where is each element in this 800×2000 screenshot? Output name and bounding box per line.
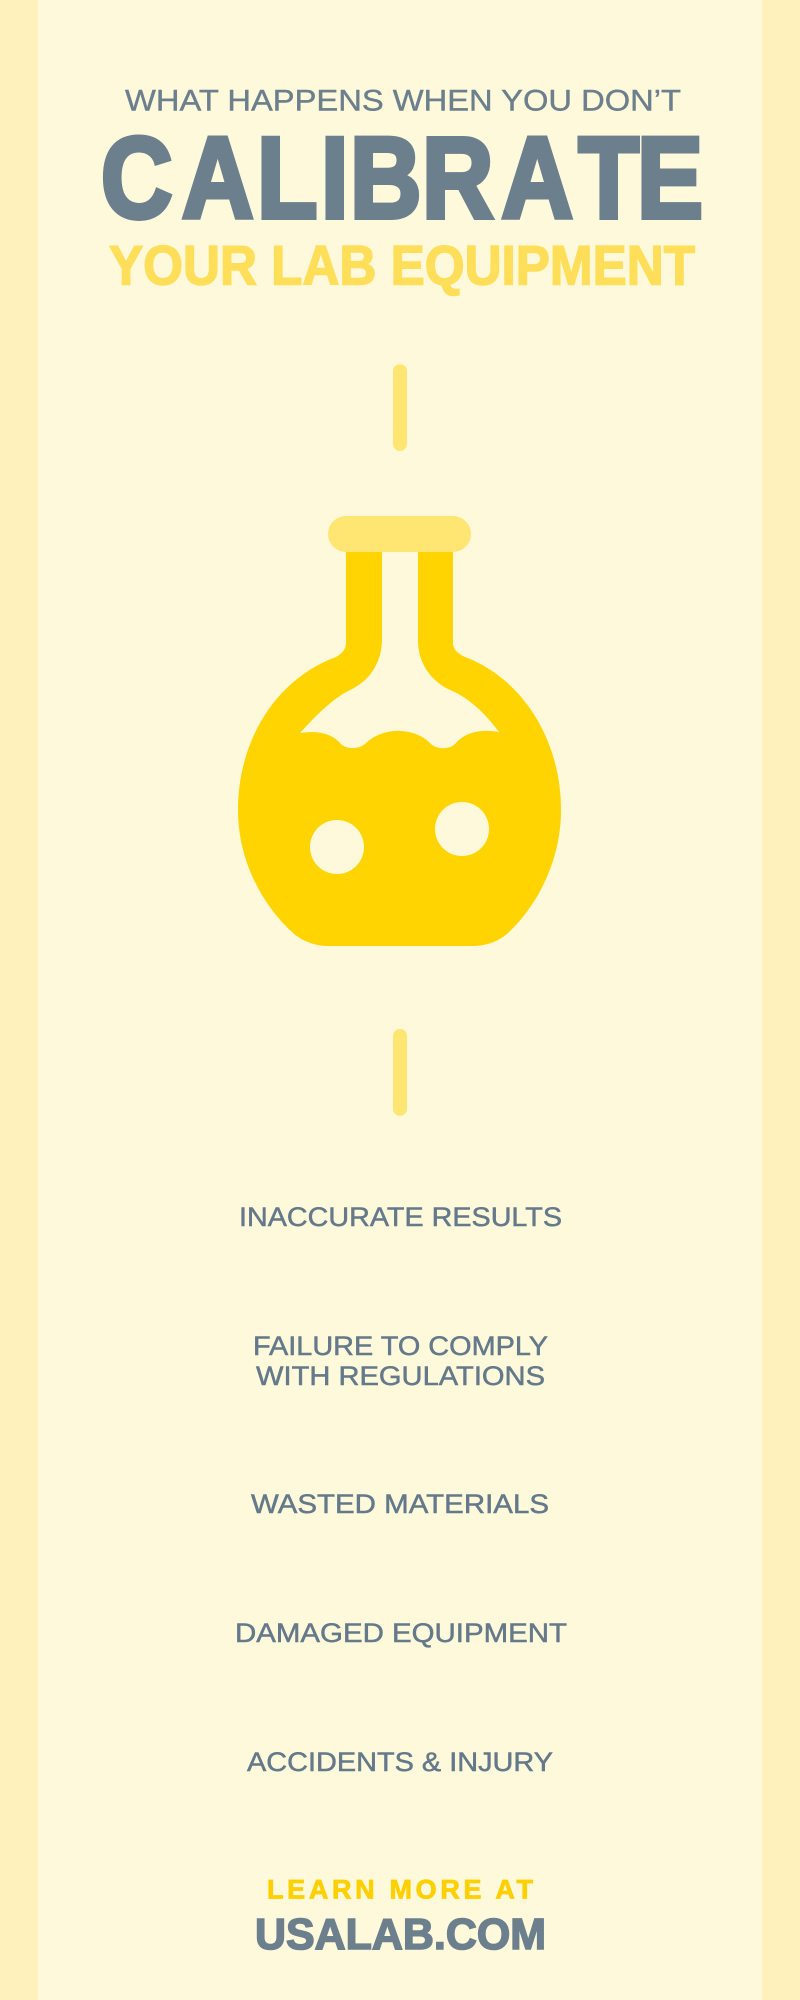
item: accidents and injury: ACCIDENTS & INJURY xyxy=(247,1747,553,1777)
item: failure to comply with regulations: FAILURE TO COMPLY xyxy=(253,1331,548,1361)
title block xyxy=(101,84,703,296)
title line: your lab equipment: YOUR LAB EQUIPMENT xyxy=(109,234,695,296)
list of consequences xyxy=(235,1202,567,1777)
divider tick: bottom xyxy=(393,1029,407,1116)
item: damaged equipment: DAMAGED EQUIPMENT xyxy=(235,1618,567,1648)
footer line: learn more at: LEARN MORE AT xyxy=(267,1874,534,1904)
left side band xyxy=(0,0,38,2000)
right side band xyxy=(762,0,800,2000)
item: failure to comply with regulations: WITH REGULATIONS xyxy=(256,1361,545,1391)
item: failure to comply with regulations xyxy=(253,1331,548,1391)
item: wasted materials: WASTED MATERIALS xyxy=(251,1489,549,1519)
flask body and liquid xyxy=(238,550,561,946)
title line: calibrate: CALIBRATE xyxy=(101,113,703,242)
footer call to action xyxy=(255,1874,546,1959)
bubble: left xyxy=(310,820,364,874)
footer line: usalab.com: USALAB.COM xyxy=(255,1910,546,1959)
item: inaccurate results: INACCURATE RESULTS xyxy=(239,1202,562,1232)
divider tick: top xyxy=(393,364,407,451)
bubble: right xyxy=(435,802,489,856)
flask stopper xyxy=(328,516,471,552)
title line: what happens when you don't: WHAT HAPPENS WHEN YOU DON’T xyxy=(125,84,681,118)
icon: round-bottom flask xyxy=(238,516,561,946)
